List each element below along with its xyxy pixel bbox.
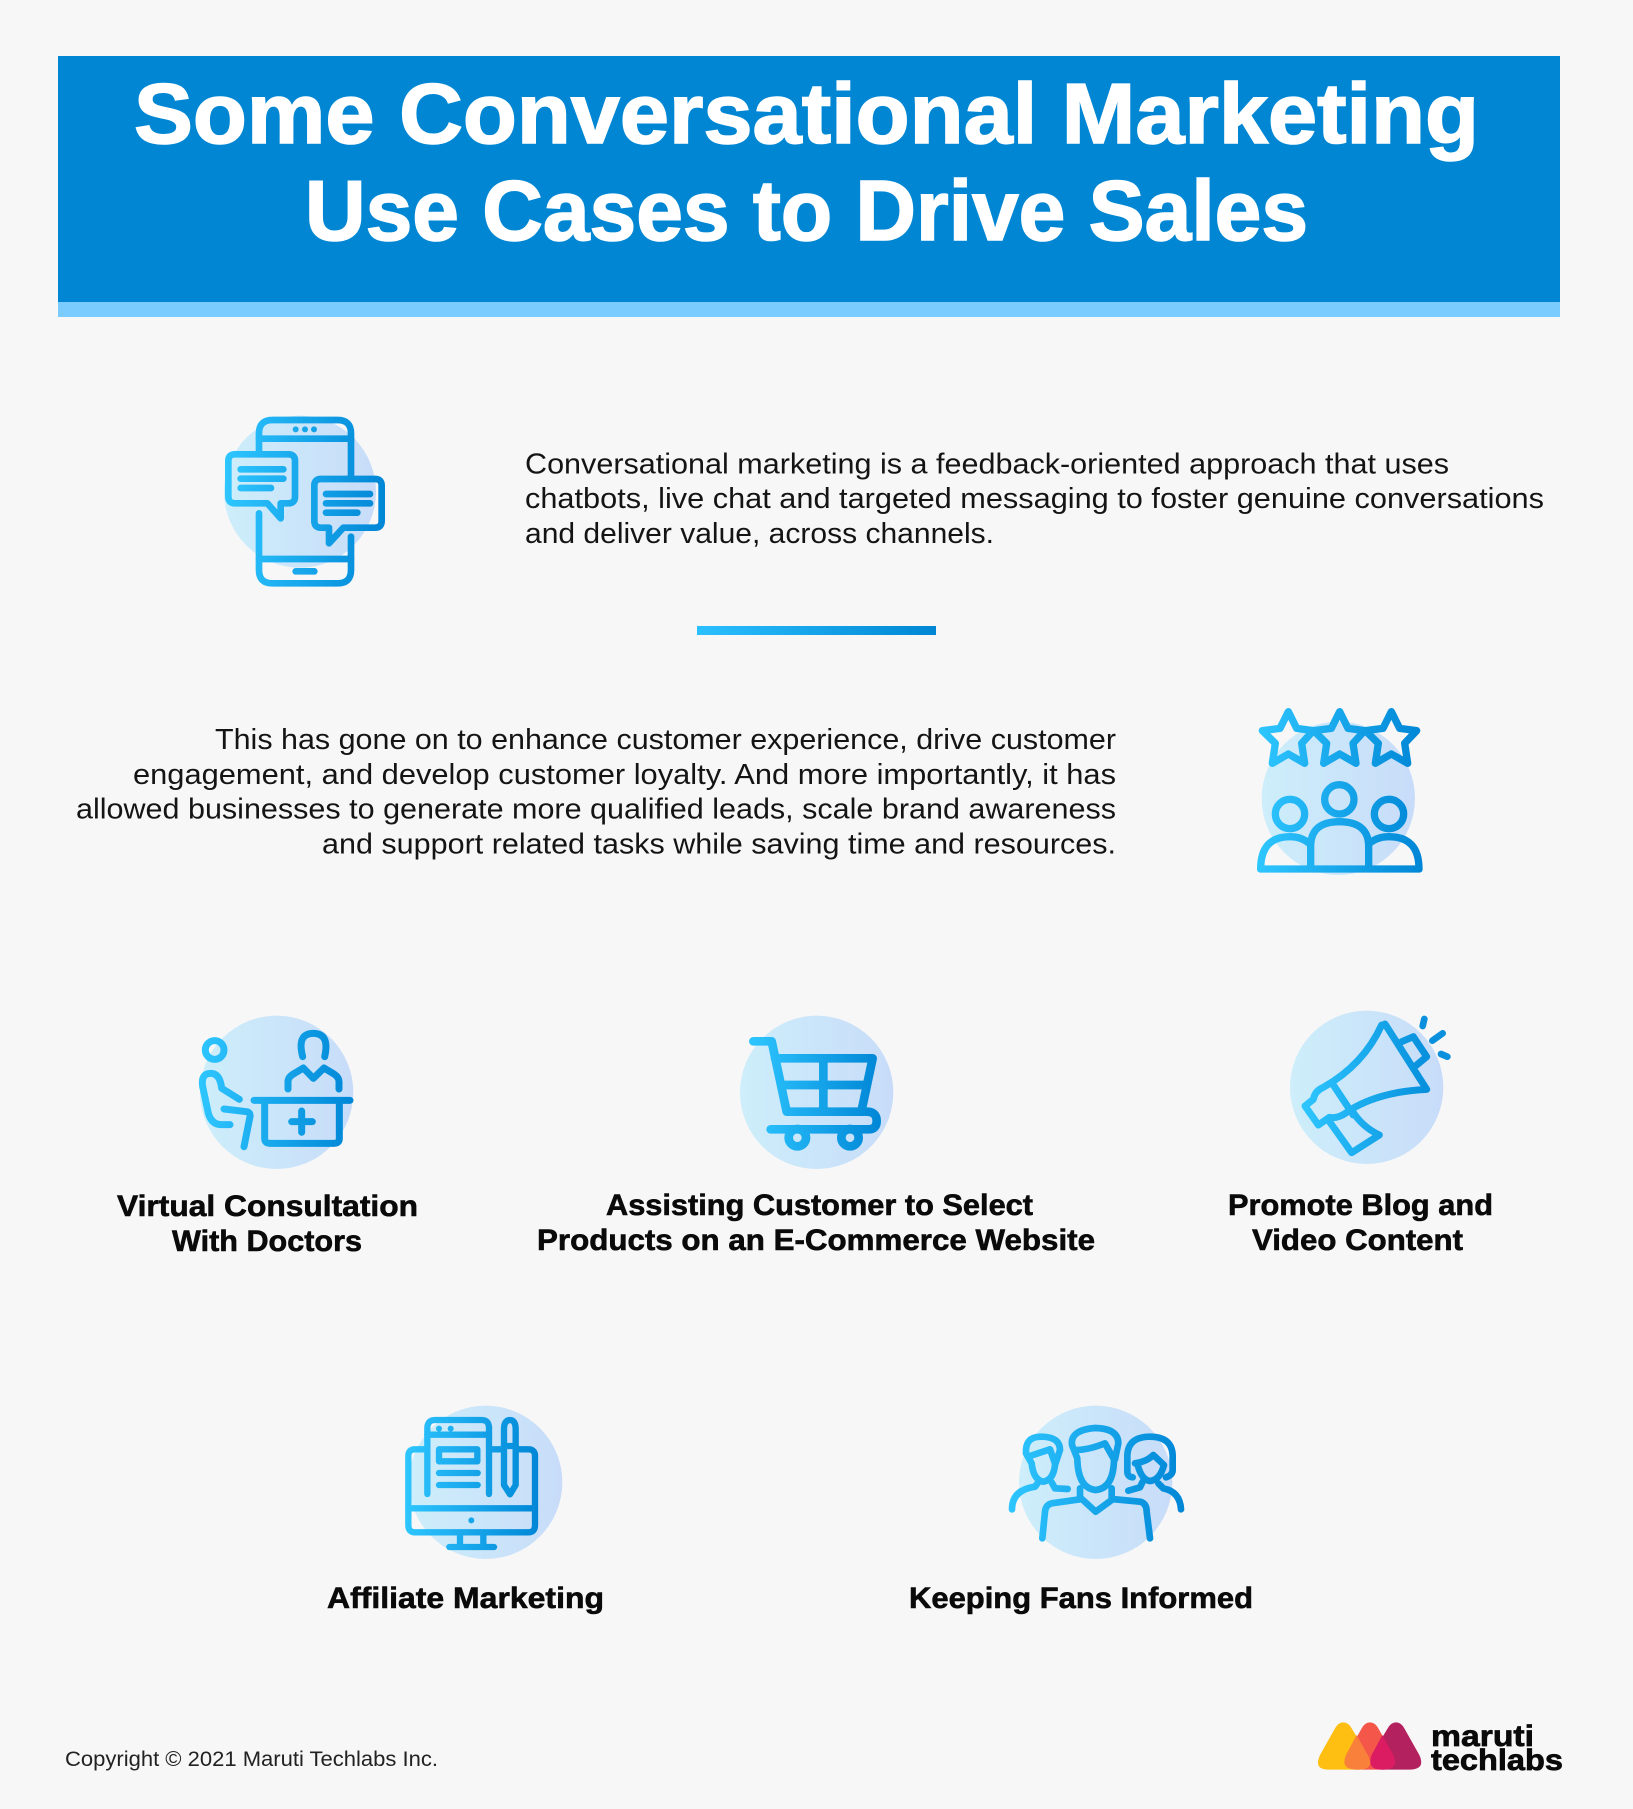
label [1228,1189,1493,1257]
intro paragraph [525,448,1544,550]
logo: maruti techlabs [1318,1720,1563,1777]
use case: keeping fans informed [909,1406,1253,1615]
second paragraph: engagement, and develop customer loyalty. And more importantly, it has [133,759,1116,791]
use case: virtual consultation [117,1016,418,1258]
icon: stars and customers [1261,712,1419,875]
icon: monitor with document and pen [408,1406,562,1559]
logo wordmark [1431,1720,1563,1777]
intro paragraph: chatbots, live chat and targeted messaging to foster genuine conversations [525,483,1544,515]
icon: phone with chat bubbles [224,416,382,583]
icon: megaphone [1290,1011,1447,1164]
second paragraph [76,724,1117,860]
label: Products on an E-Commerce Website [537,1224,1095,1257]
logo wordmark: maruti [1431,1720,1534,1753]
label: Keeping Fans Informed [909,1582,1253,1615]
label: Promote Blog and [1228,1189,1493,1222]
second paragraph: allowed businesses to generate more qualified leads, scale brand awareness [76,794,1116,826]
label: Assisting Customer to Select [606,1189,1033,1222]
icon: group of people [1012,1406,1181,1559]
intro paragraph: and deliver value, across channels. [525,518,994,550]
second paragraph: and support related tasks while saving time and resources. [322,828,1116,860]
icon: shopping cart [740,1016,893,1169]
header banner [58,56,1560,317]
use case: affiliate marketing [327,1406,604,1615]
second paragraph: This has gone on to enhance customer experience, drive customer [215,724,1117,756]
icon: doctor at desk [200,1016,353,1169]
label: With Doctors [172,1225,362,1258]
copyright: Copyright © 2021 Maruti Techlabs Inc. [65,1748,438,1771]
use case: promote content [1228,1011,1493,1257]
title: Use Cases to Drive Sales [305,164,1308,259]
logo mark [1318,1722,1421,1770]
logo wordmark: techlabs [1431,1744,1563,1777]
label: Affiliate Marketing [327,1582,604,1615]
intro paragraph: Conversational marketing is a feedback-oriented approach that uses [525,448,1449,480]
title [134,67,1479,259]
title: Some Conversational Marketing [134,67,1479,162]
label [537,1189,1095,1257]
label [117,1190,418,1258]
label: Video Content [1252,1224,1463,1257]
use case: e-commerce [537,1016,1095,1257]
label: Virtual Consultation [117,1190,418,1223]
